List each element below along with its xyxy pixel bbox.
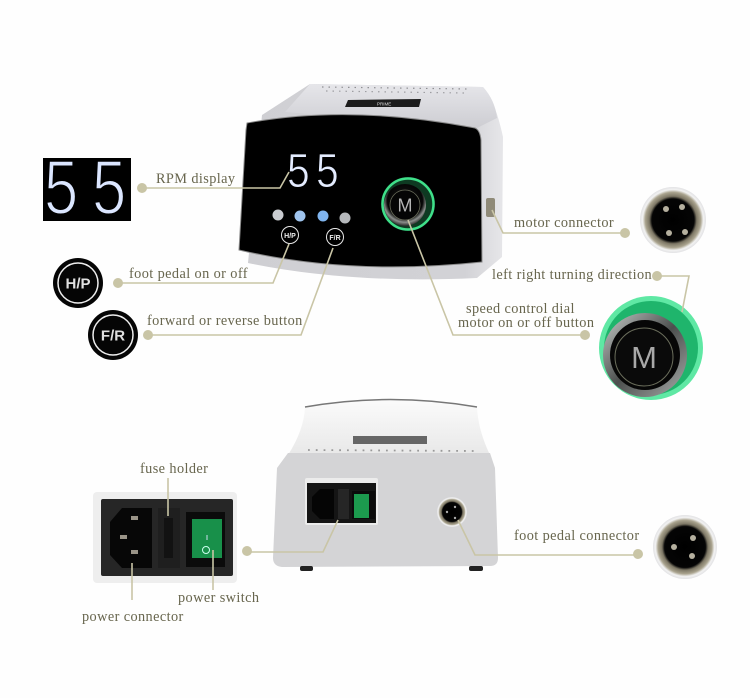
module frame (93, 492, 237, 583)
H/P button: H/P (284, 233, 296, 240)
mode icons (272, 210, 350, 224)
rear vents (308, 450, 475, 451)
device top vents (285, 84, 497, 128)
label: motor connector: motor connector (514, 215, 614, 231)
panel RPM readout (287, 145, 339, 198)
F/R inset: F/R (101, 328, 125, 344)
rear power module (305, 478, 378, 525)
power module inset (93, 492, 237, 583)
green switch (186, 512, 225, 567)
leader: turning direction (652, 271, 689, 312)
label: foot pedal connector: foot pedal connector (514, 528, 640, 544)
RPM display inset: 5 (92, 144, 126, 231)
front black panel (239, 115, 482, 267)
motor port (486, 198, 495, 217)
power socket (110, 508, 152, 568)
label: fuse holder: fuse holder (140, 461, 208, 477)
speed dial: M (398, 196, 412, 216)
F/R inset (88, 310, 138, 360)
leader: RPM display (137, 172, 289, 193)
label: forward or reverse button: forward or reverse button (147, 313, 303, 329)
leader: speed dial (408, 220, 590, 340)
brand plate: PRIME (377, 102, 391, 106)
label: RPM display: RPM display (156, 171, 236, 187)
feet (300, 566, 483, 571)
leader: motor connector (492, 210, 630, 238)
leader: foot pedal (113, 244, 289, 288)
label: motor on or off button: motor on or off button (458, 315, 594, 331)
rear foot pedal port (437, 497, 467, 527)
label: foot pedal on or off: foot pedal on or off (129, 266, 248, 282)
foot pedal connector inset (653, 515, 717, 579)
fuse holder (158, 508, 180, 568)
RPM display inset (43, 144, 131, 231)
H/P inset (53, 258, 103, 308)
leader: foot pedal connector (458, 520, 643, 559)
rear label (353, 436, 427, 444)
leader: rear power module (242, 520, 338, 556)
brand plate (345, 99, 421, 107)
leader: power connector (131, 563, 133, 600)
H/P button (282, 226, 298, 244)
F/R button (326, 228, 344, 246)
label: speed control dial: speed control dial (466, 301, 575, 317)
panel RPM readout: 5 (316, 145, 339, 198)
H/P inset: H/P (65, 276, 91, 292)
RPM display inset: 5 (44, 144, 78, 231)
speed dial (381, 177, 435, 231)
F/R button: F/R (329, 235, 341, 242)
speed dial inset (599, 296, 703, 400)
rear upper shell (288, 400, 490, 455)
label: power switch: power switch (178, 590, 259, 606)
motor connector inset (640, 187, 706, 253)
device body (248, 84, 503, 279)
leader: power switch (212, 550, 214, 590)
rear lower shell (273, 453, 498, 567)
speed dial inset: M (631, 340, 657, 375)
label: left right turning direction: left right turning direction (492, 267, 652, 283)
rear device (273, 400, 498, 571)
leader: fuse holder (167, 478, 169, 516)
panel RPM readout: 5 (287, 145, 310, 198)
leader: forward reverse (143, 248, 333, 340)
label: power connector: power connector (82, 609, 184, 625)
front device (239, 84, 503, 279)
